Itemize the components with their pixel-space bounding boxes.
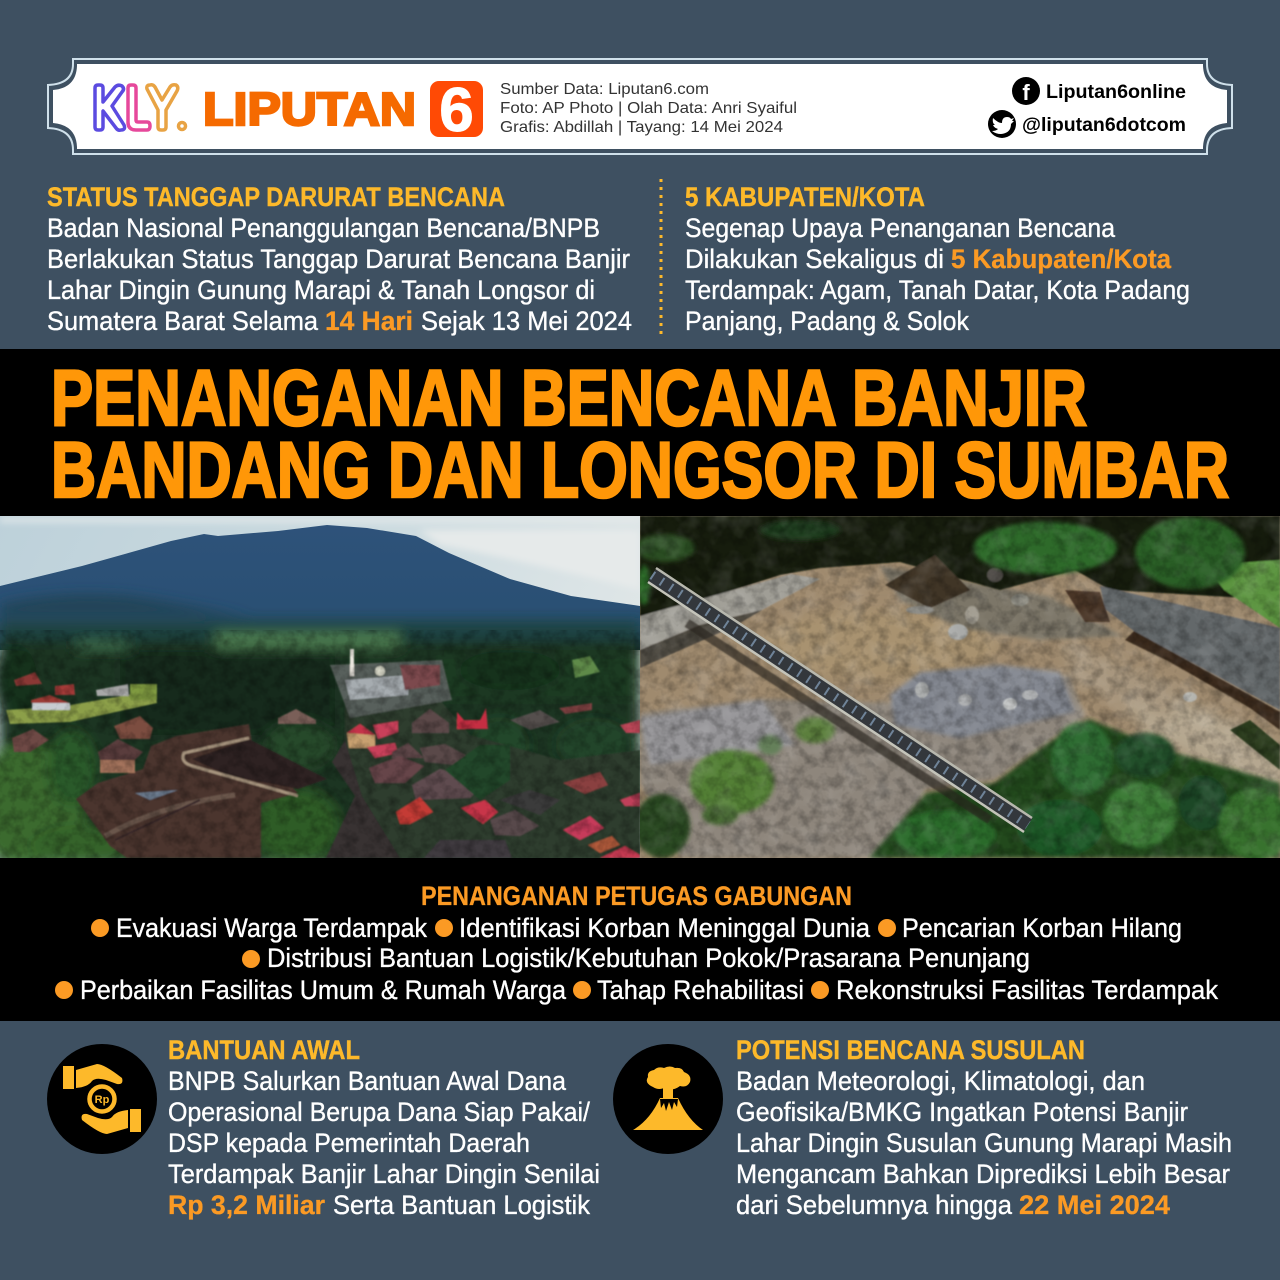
village ground (345, 700, 640, 858)
text block: potensi bencana susulan (736, 1035, 1232, 1220)
rice fields (6, 690, 157, 724)
text block: status tanggap darurat: STATUS TANGGAP DARURAT BENCANA (47, 182, 505, 212)
action list: Distribusi Bantuan Logistik/Kebutuhan Pokok/Prasarana Penunjang (267, 943, 1030, 973)
credits (500, 81, 797, 136)
text block: status tanggap darurat: Badan Nasional Penanggulangan Bencana/BNPB (47, 213, 600, 243)
text block: 5 kabupaten/kota (685, 182, 1190, 336)
title band (0, 349, 1280, 516)
text block: 5 kabupaten/kota: Terdampak: Agam, Tanah Datar, Kota Padang (685, 275, 1190, 305)
action list: Pencarian Korban Hilang (902, 913, 1182, 943)
rubble (640, 669, 1085, 858)
text block: status tanggap darurat: Sejak 13 Mei 2024 (421, 306, 632, 336)
text block: bantuan awal: Operasional Berupa Dana Siap Pakai/ (168, 1097, 590, 1127)
action list: Tahap Rehabilitasi (597, 975, 804, 1005)
actions band (0, 858, 1280, 1021)
logo: KLY (95, 85, 186, 130)
boulders (948, 624, 968, 640)
bridge (648, 568, 1032, 832)
text block: potensi bencana susulan: POTENSI BENCANA SUSULAN (736, 1035, 1085, 1065)
icon: hands with rupiah coin (47, 1044, 157, 1154)
icon: hands with rupiah coin: Rp (95, 1094, 110, 1106)
text block: status tanggap darurat: Lahar Dingin Gunung Marapi & Tanah Longsor di (47, 275, 595, 305)
text block: potensi bencana susulan: Geofisika/BMKG Ingatkan Potensi Banjir (736, 1097, 1188, 1127)
social: facebook: f (1022, 80, 1030, 105)
text block: potensi bencana susulan: Lahar Dingin Susulan Gunung Marapi Masih (736, 1128, 1232, 1158)
social: twitter: @liputan6dotcom (1022, 115, 1186, 136)
text block: 5 kabupaten/kota: 5 Kabupaten/Kota (951, 244, 1172, 274)
mud flow (76, 724, 298, 858)
bridge shadow (687, 623, 990, 820)
icon: erupting volcano (613, 1044, 723, 1154)
text block: bantuan awal: BANTUAN AWAL (168, 1035, 360, 1065)
text block: potensi bencana susulan: 22 Mei 2024 (1019, 1190, 1170, 1220)
text block: potensi bencana susulan: Badan Meteorologi, Klimatologi, dan (736, 1066, 1145, 1096)
text block: status tanggap darurat: Berlakukan Status Tanggap Darurat Bencana Banjir (47, 244, 630, 274)
text block: bantuan awal: BNPB Salurkan Bantuan Awal Dana (168, 1066, 567, 1096)
road (326, 740, 400, 858)
text block: bantuan awal: Rp 3,2 Miliar (168, 1190, 325, 1220)
action list: Rekonstruksi Fasilitas Terdampak (836, 975, 1218, 1005)
logo: Liputan 6: LIPUTAN (203, 83, 416, 135)
text block: bantuan awal (168, 1035, 600, 1220)
action list: Perbaikan Fasilitas Umum & Rumah Warga (80, 975, 567, 1005)
text block: status tanggap darurat: Sumatera Barat Selama (47, 306, 319, 336)
text block: status tanggap darurat (47, 182, 632, 336)
photo: mount marapi and village (0, 516, 640, 867)
social: facebook: Liputan6online (1046, 82, 1186, 103)
text block: status tanggap darurat: 14 Hari (325, 306, 413, 336)
header banner (48, 59, 1232, 154)
social: twitter (988, 110, 1186, 138)
actions heading: PENANGANAN PETUGAS GABUNGAN (421, 881, 852, 911)
action list (55, 913, 1218, 1005)
houses (278, 709, 316, 724)
text block: potensi bencana susulan: Mengancam Bahkan Diprediksi Lebih Besar (736, 1159, 1230, 1189)
text block: 5 kabupaten/kota: 5 KABUPATEN/KOTA (685, 182, 925, 212)
social: facebook (1012, 77, 1186, 105)
text block: 5 kabupaten/kota: Panjang, Padang & Solok (685, 306, 969, 336)
photo: flooded river and bridge (634, 516, 1280, 861)
logo: Liputan 6: 6 (439, 76, 474, 145)
text block: potensi bencana susulan: dari Sebelumnya hingga (736, 1190, 1013, 1220)
credits: Grafis: Abdillah | Tayang: 14 Mei 2024 (500, 119, 783, 136)
action list: Identifikasi Korban Meninggal Dunia (459, 913, 871, 943)
action list: Evakuasi Warga Terdampak (116, 913, 427, 943)
credits: Foto: AP Photo | Olah Data: Anri Syaiful (500, 100, 797, 117)
logo: Liputan 6 (203, 76, 483, 145)
credits: Sumber Data: Liputan6.com (500, 81, 709, 98)
text block: bantuan awal: DSP kepada Pemerintah Daerah (168, 1128, 530, 1158)
text block: bantuan awal: Serta Bantuan Logistik (333, 1190, 590, 1220)
text block: bantuan awal: Terdampak Banjir Lahar Dingin Senilai (168, 1159, 600, 1189)
text block: 5 kabupaten/kota: Segenap Upaya Penanganan Bencana (685, 213, 1116, 243)
text block: 5 kabupaten/kota: Dilakukan Sekaligus di (685, 244, 944, 274)
